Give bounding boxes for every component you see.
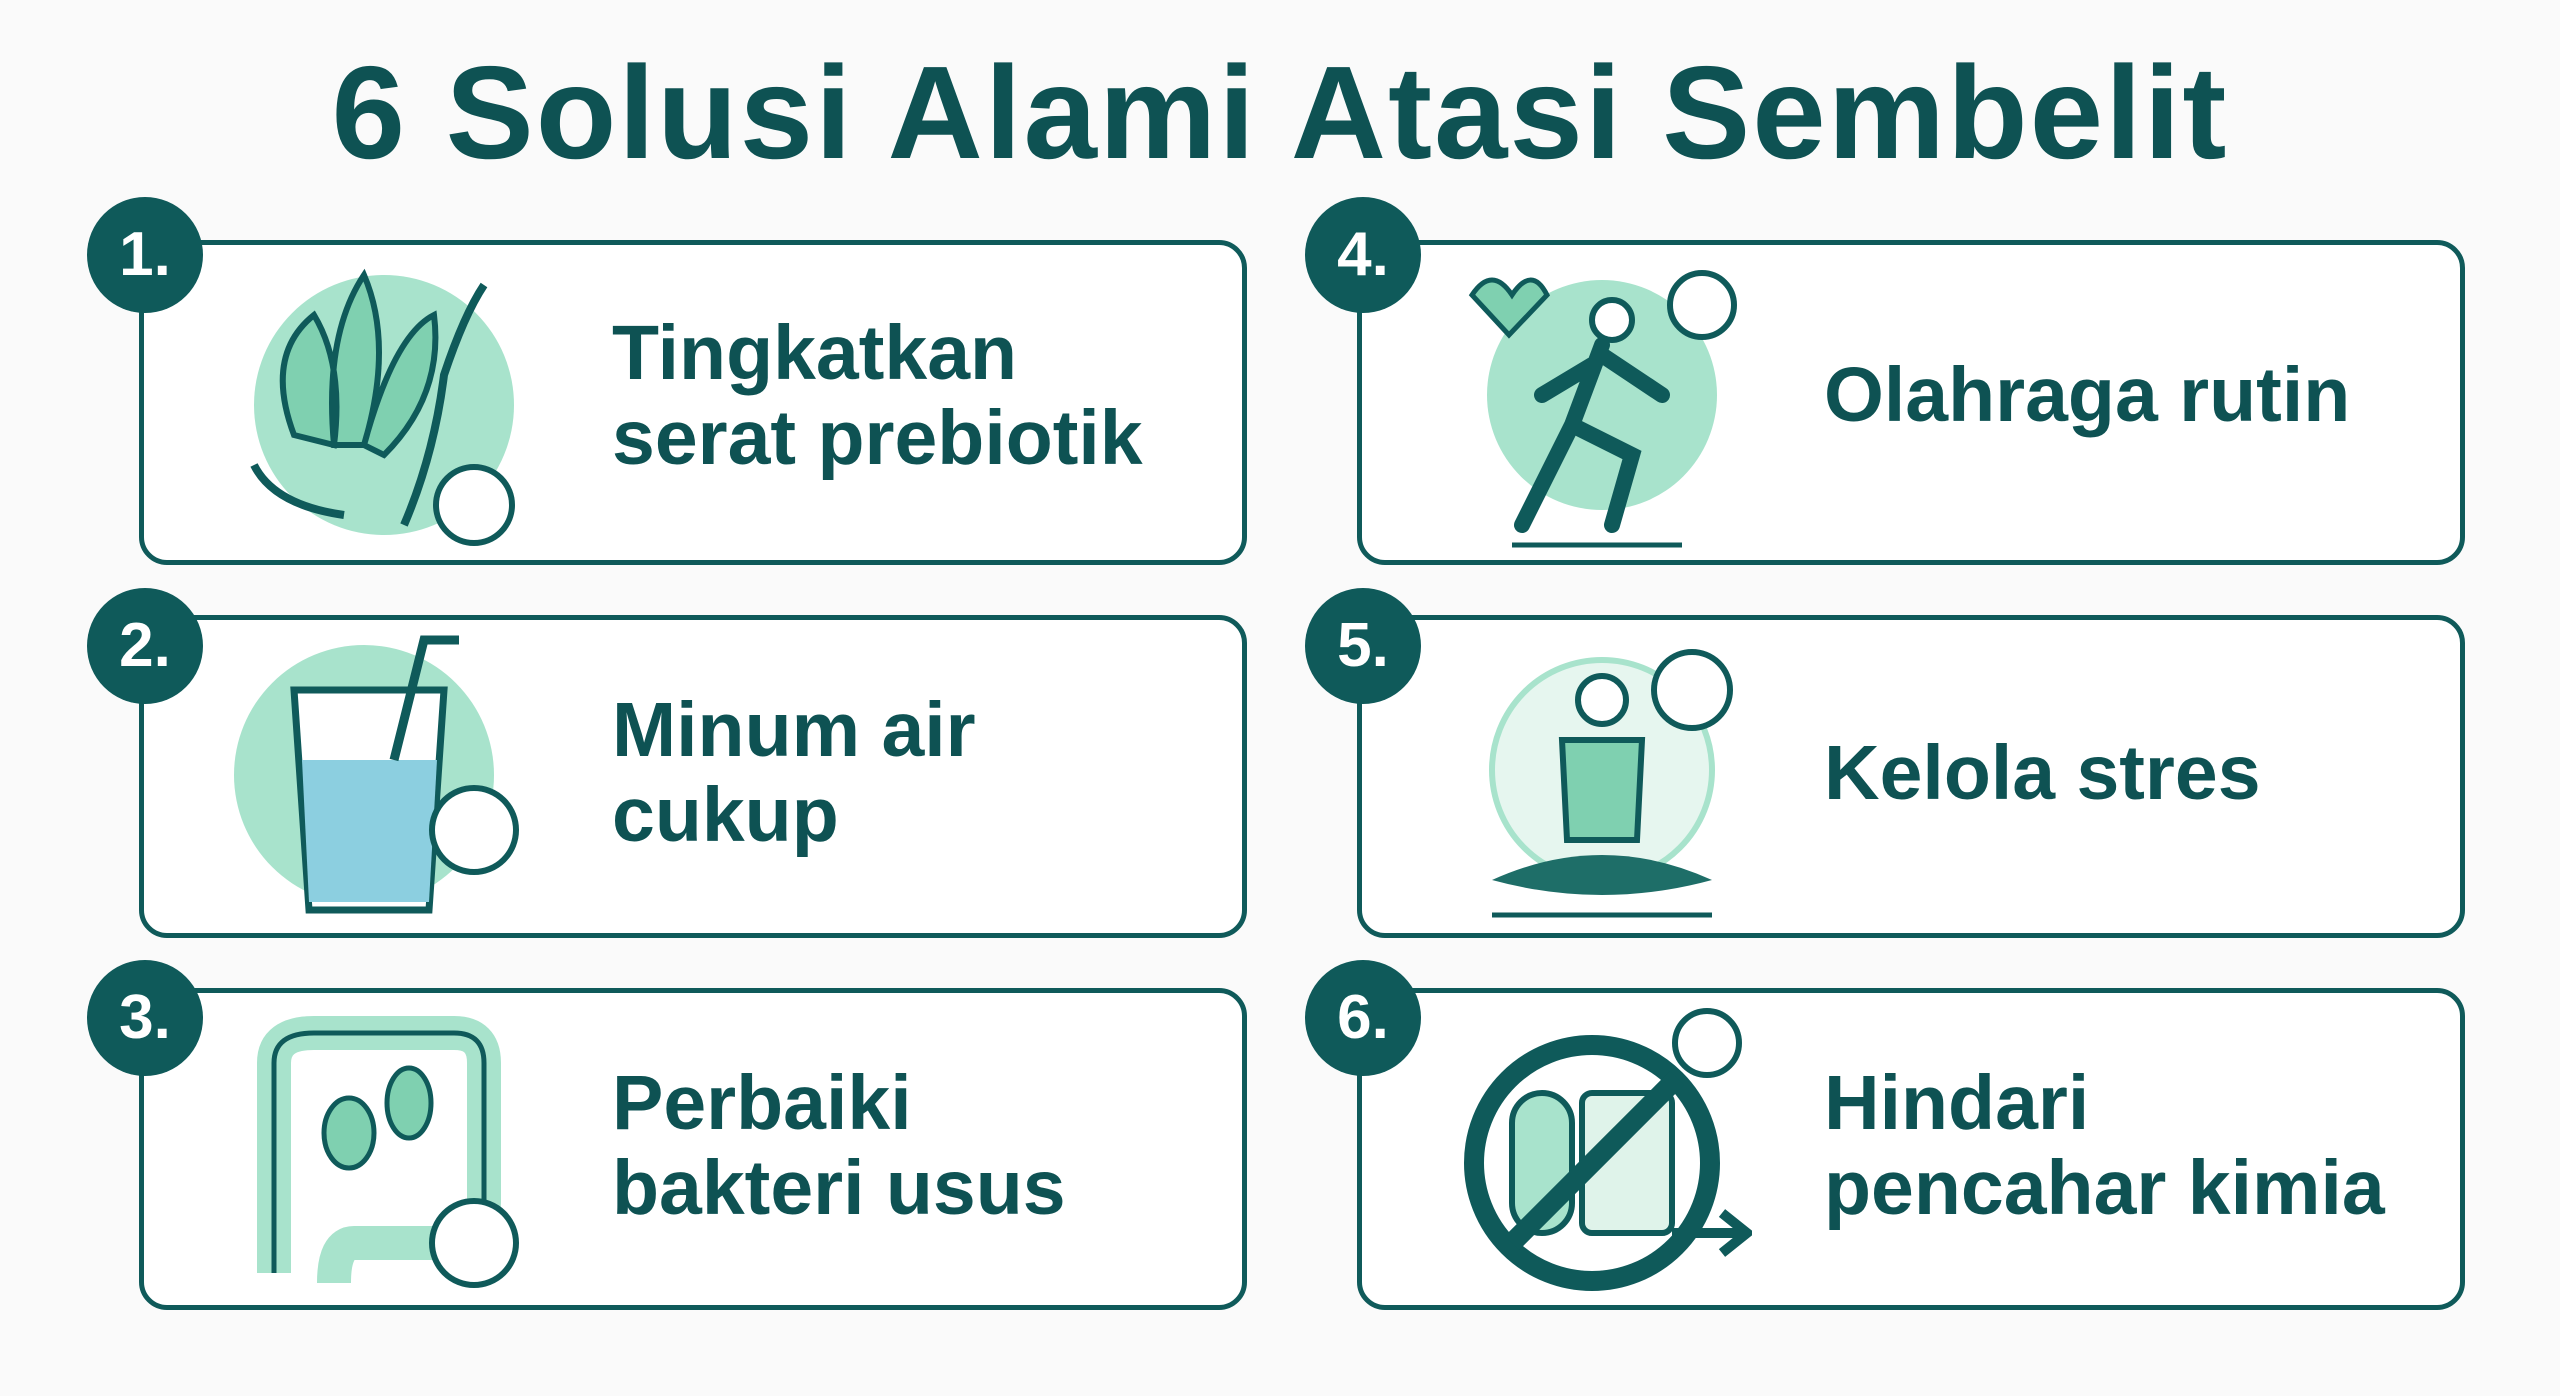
text: cukup: [612, 772, 839, 858]
number 1: 1.: [119, 220, 171, 289]
number 4: 4.: [1337, 220, 1389, 289]
text: [612, 310, 1143, 481]
text: [612, 687, 976, 858]
text: Kelola stres: [1824, 730, 2261, 816]
text: pencahar kimia: [1824, 1145, 2385, 1231]
panel: card 2: [139, 615, 1247, 938]
title: 6 Solusi Alami Atasi Sembelit: [332, 39, 2228, 186]
text: Perbaiki: [612, 1060, 912, 1146]
number 3: 3.: [119, 983, 171, 1052]
icon: meditation: [1489, 649, 1733, 918]
icon: leaves: [250, 268, 515, 546]
icon: running: [1468, 270, 1737, 548]
icon: water glass: [234, 636, 519, 914]
number 2: 2.: [119, 611, 171, 680]
panel: card 4: [1357, 240, 2465, 565]
text: [1824, 1060, 2386, 1231]
number 3: [87, 960, 203, 1076]
text: Olahraga rutin: [1824, 352, 2350, 438]
text: Minum air: [612, 687, 976, 773]
number 6: [1305, 960, 1421, 1076]
number 4: [1305, 197, 1421, 313]
text: [612, 1060, 1066, 1231]
number 5: 5.: [1337, 611, 1389, 680]
icon: gut bacteria: [257, 1016, 519, 1288]
text: Hindari: [1824, 1060, 2089, 1146]
panel: card 5: [1357, 615, 2465, 938]
number 2: [87, 588, 203, 704]
text: serat prebiotik: [612, 395, 1143, 481]
number 1: [87, 197, 203, 313]
number 6: 6.: [1337, 983, 1389, 1052]
panel: card 3: [139, 988, 1247, 1310]
panel: card 6: [1357, 988, 2465, 1310]
number 5: [1305, 588, 1421, 704]
text: Tingkatkan: [612, 310, 1017, 396]
icon: no laxatives: [1464, 1008, 1752, 1291]
text: bakteri usus: [612, 1145, 1066, 1231]
panel: card 1: [139, 240, 1247, 565]
